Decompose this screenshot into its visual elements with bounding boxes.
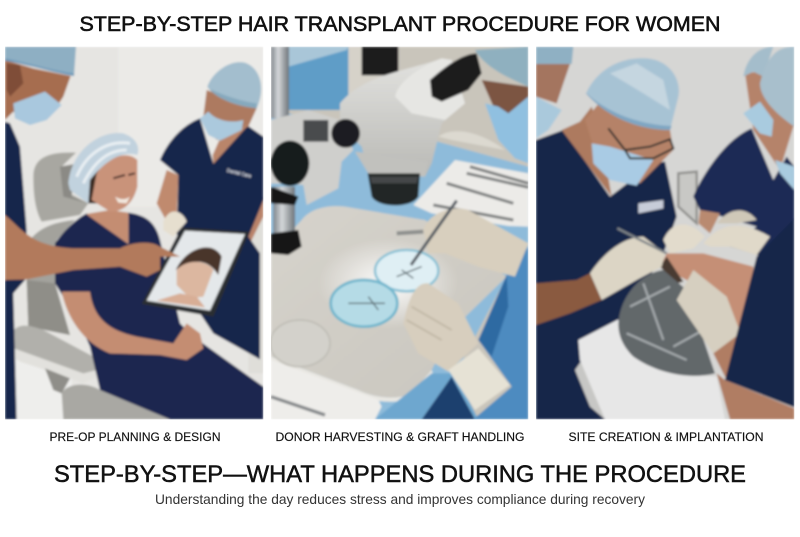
caption: site: SITE CREATION & IMPLANTATION <box>568 432 764 444</box>
patient head in hair net <box>618 253 753 376</box>
chair <box>14 153 170 419</box>
section heading: STEP-BY-STEP—WHAT HAPPENS DURING THE PROCEDURE <box>54 461 746 488</box>
tablet arm support <box>217 292 249 317</box>
surgical gown <box>422 377 475 419</box>
panel: pre-op planning photo <box>5 47 263 419</box>
technician face <box>475 47 528 163</box>
assistant: Dental Care <box>226 168 252 179</box>
patient <box>55 133 263 419</box>
title: STEP-BY-STEP HAIR TRANSPLANT PROCEDURE FOR WOMEN <box>80 13 720 36</box>
assistant <box>157 62 263 359</box>
surgeon <box>536 58 679 419</box>
panel: site creation photo <box>536 47 794 419</box>
tablet with face scan <box>142 227 249 317</box>
tweezers and gloved hands <box>397 201 528 410</box>
subtitle: Understanding the day reduces stress and improves compliance during recovery <box>155 491 645 507</box>
doctor pointing <box>5 47 180 419</box>
folded towel <box>271 360 382 419</box>
gloved hands <box>590 210 770 353</box>
sheet and pillow <box>575 319 725 419</box>
work surface <box>271 206 507 402</box>
caption: pre-op: PRE-OP PLANNING & DESIGN <box>50 432 220 444</box>
background assistant <box>693 47 794 257</box>
petri dishes <box>270 250 438 367</box>
panel: donor harvesting photo <box>270 47 528 419</box>
caption: donor: DONOR HARVESTING & GRAFT HANDLING <box>276 432 525 444</box>
instrument tray <box>413 160 528 227</box>
foreground assistant <box>713 218 794 419</box>
left colleague <box>536 47 573 138</box>
microscope <box>271 47 482 255</box>
